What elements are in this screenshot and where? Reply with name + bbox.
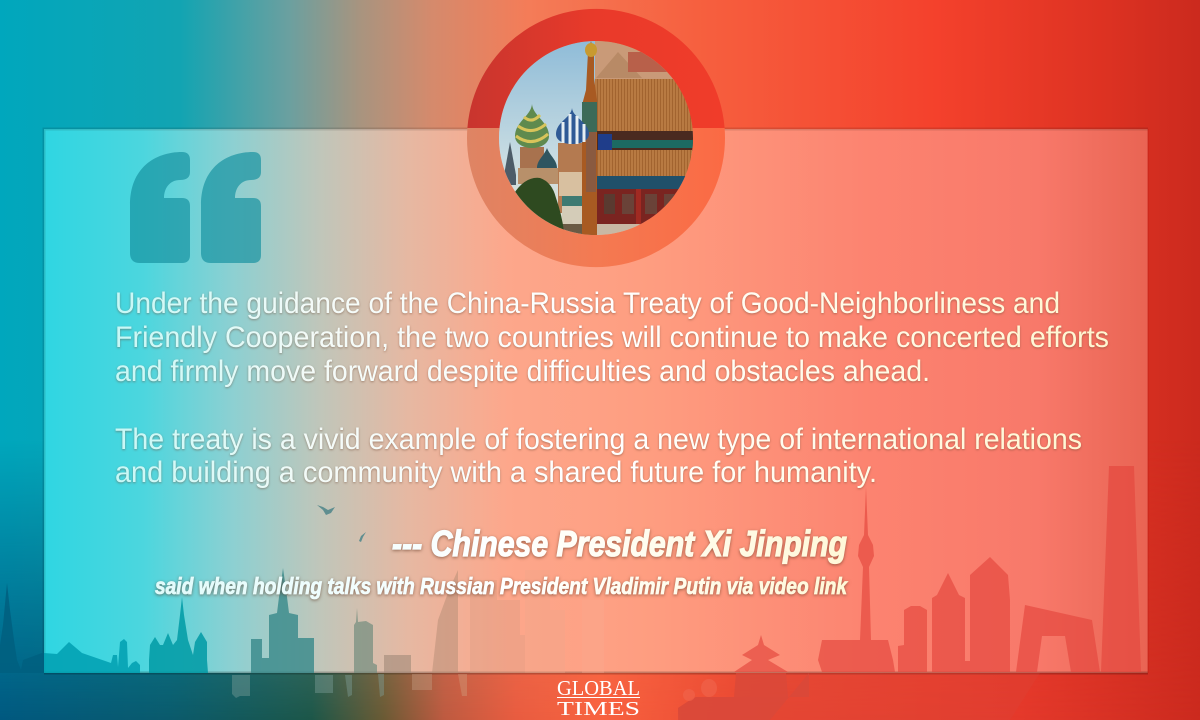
- CCTV headquarters: [1016, 605, 1100, 672]
- trees: [513, 178, 564, 232]
- icon: quotation mark: [130, 152, 261, 263]
- small dark dome: [537, 148, 557, 168]
- icon: birds: [317, 505, 366, 542]
- marble balustrade: [597, 224, 640, 235]
- Kremlin tower: [0, 583, 44, 673]
- St Basil's silhouette: [149, 597, 208, 673]
- chapel body: [520, 147, 544, 168]
- TV tower: [858, 487, 874, 640]
- logo: Global Times: TIMES: [557, 698, 640, 720]
- tent tower: [582, 41, 597, 236]
- sky: [499, 41, 599, 237]
- chapel lower body: [518, 168, 558, 184]
- text block: quote paragraph two: The treaty is a vivid example of fostering a new type of international relations: [115, 423, 1082, 456]
- ring around photo: [467, 9, 725, 267]
- lower palace roof: [595, 150, 695, 176]
- China Zun tower: [1101, 466, 1141, 672]
- hills: [44, 639, 140, 673]
- striped blue dome: [556, 108, 589, 144]
- text block: quote paragraph one: [115, 287, 1109, 388]
- text block: quote paragraph one: Friendly Cooperation, the two countries will continue to make concerted efforts: [115, 321, 1109, 354]
- skyline: Beijing: [734, 466, 1141, 672]
- text block: quote paragraph one: and firmly move forward despite difficulties and obstacles ahead.: [115, 355, 930, 388]
- skyline base below panel (right): [678, 673, 1040, 720]
- faded business towers: [432, 570, 458, 673]
- Temple of Heaven: [734, 635, 788, 672]
- photo: St Basil's and the Forbidden City: [499, 39, 695, 238]
- lower painted band: [597, 176, 686, 189]
- skyline base below panel (left): [232, 674, 467, 698]
- logo: Global Times: GLOBAL: [557, 676, 640, 700]
- low building: [384, 655, 411, 673]
- logo: Global Times: [557, 676, 640, 720]
- text block: quote paragraph two: [115, 423, 1082, 489]
- tower with mast: [354, 608, 377, 673]
- palace hall: [818, 640, 895, 672]
- text block: quote paragraph one: Under the guidance of the China-Russia Treaty of Good-Neighborliness and: [115, 287, 1060, 320]
- palace red wall: [597, 189, 678, 225]
- text block: quote paragraph two: and building a community with a shared future for humanity.: [115, 456, 877, 489]
- Stalinist tower: [251, 568, 314, 673]
- upper palace roofs: [595, 41, 674, 81]
- church column: [558, 143, 596, 238]
- main palace roof: [595, 79, 695, 131]
- panel: translucent quote card: [44, 129, 1148, 673]
- far tower: [504, 142, 516, 185]
- green dome: [515, 104, 549, 148]
- attribution name: --- Chinese President Xi Jinping: [392, 523, 847, 564]
- skyline: Moscow: [0, 568, 604, 673]
- office blocks: [898, 606, 927, 672]
- attribution context: said when holding talks with Russian President Vladimir Putin via video link: [155, 573, 848, 599]
- painted band: [595, 131, 695, 151]
